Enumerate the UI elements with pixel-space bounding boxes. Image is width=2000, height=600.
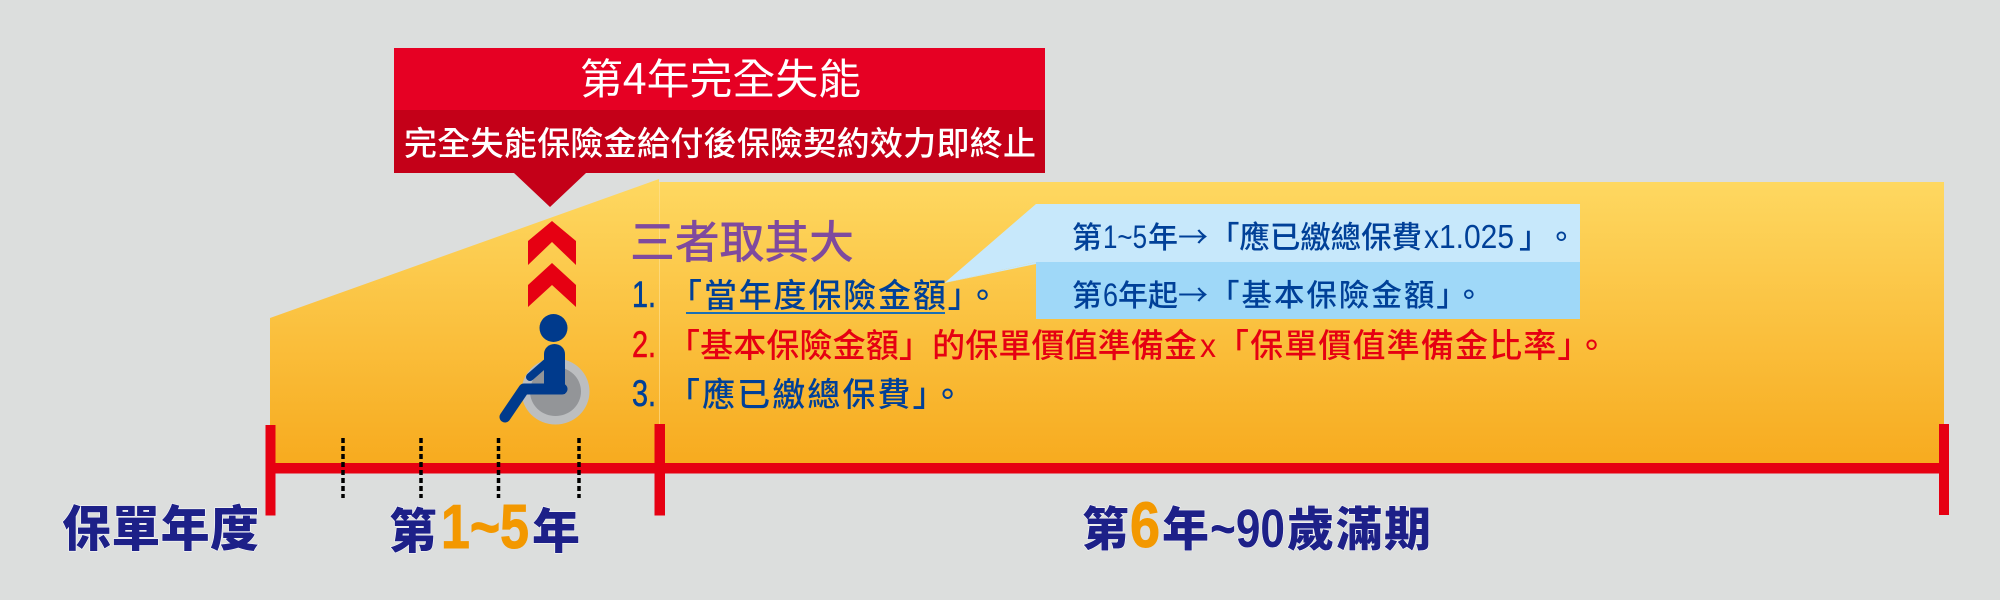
callout line 1: 第: [1072, 213, 1102, 257]
list item 2: 「保單價值準備金比率」。: [1216, 319, 1608, 367]
icon: wheelchair user: [505, 314, 590, 424]
callout line 1: 」: [1519, 213, 1550, 257]
callout line 1: 年: [1148, 213, 1178, 257]
callout line 1: x1.025: [1424, 218, 1514, 255]
callout line 1: [1072, 213, 1576, 257]
heading: take the largest of three: 三者取其大: [630, 206, 854, 271]
list item 2: x: [1200, 327, 1216, 364]
callout line 1: 。: [1546, 213, 1576, 257]
callout: item 1 explanation: [944, 204, 1580, 319]
list item 1: 1.: [632, 274, 656, 315]
callout line 2: →: [1178, 271, 1208, 315]
callout line 2: 年起: [1118, 271, 1178, 315]
list item 2: 2.: [632, 324, 656, 365]
label: years 1 to 5: 1~5: [441, 493, 529, 562]
label: years 1 to 5: [389, 492, 580, 562]
label: years 1 to 5: 年: [532, 492, 580, 562]
list item 3: 3.: [632, 373, 656, 414]
timeline: [266, 424, 1949, 516]
callout line 2: 第: [1072, 271, 1102, 315]
label: year 6 to age 90: ~90: [1210, 499, 1285, 559]
callout line 2: 6: [1103, 277, 1118, 313]
list item 2: 「基本保險金額」的保單價值準備金: [667, 319, 1197, 367]
list item 1: 「當年度保險金額」。: [669, 269, 999, 317]
list item 2: [632, 319, 1608, 367]
label: year 6 to age 90: 6: [1130, 489, 1160, 561]
callout line 2: [1072, 271, 1484, 315]
callout line 1: →: [1178, 213, 1208, 257]
icon: upward chevrons: [528, 221, 576, 307]
callout: total disability: [394, 46, 1045, 207]
label: year 6 to age 90: 第: [1082, 491, 1129, 560]
callout line 1: 1~5: [1103, 219, 1147, 255]
label: policy year: 保單年度: [62, 490, 259, 561]
callout line 2: 「基本保險金額」。: [1209, 271, 1484, 315]
panel: yellow coverage area: [270, 179, 1944, 465]
label: year 6 to age 90: 歲滿期: [1287, 491, 1431, 560]
label: years 1 to 5: 第: [389, 492, 437, 562]
label: year 6 to age 90: [1082, 489, 1431, 561]
callout heading: 第4年完全失能: [580, 46, 861, 107]
label: year 6 to age 90: 年: [1162, 491, 1209, 560]
list item 3: 「應已繳總保費」。: [667, 368, 964, 416]
underline: [686, 312, 945, 314]
callout subheading: 完全失能保險金給付後保險契約效力即終止: [404, 117, 1036, 165]
callout line 1: 「應已繳總保費: [1209, 213, 1422, 257]
